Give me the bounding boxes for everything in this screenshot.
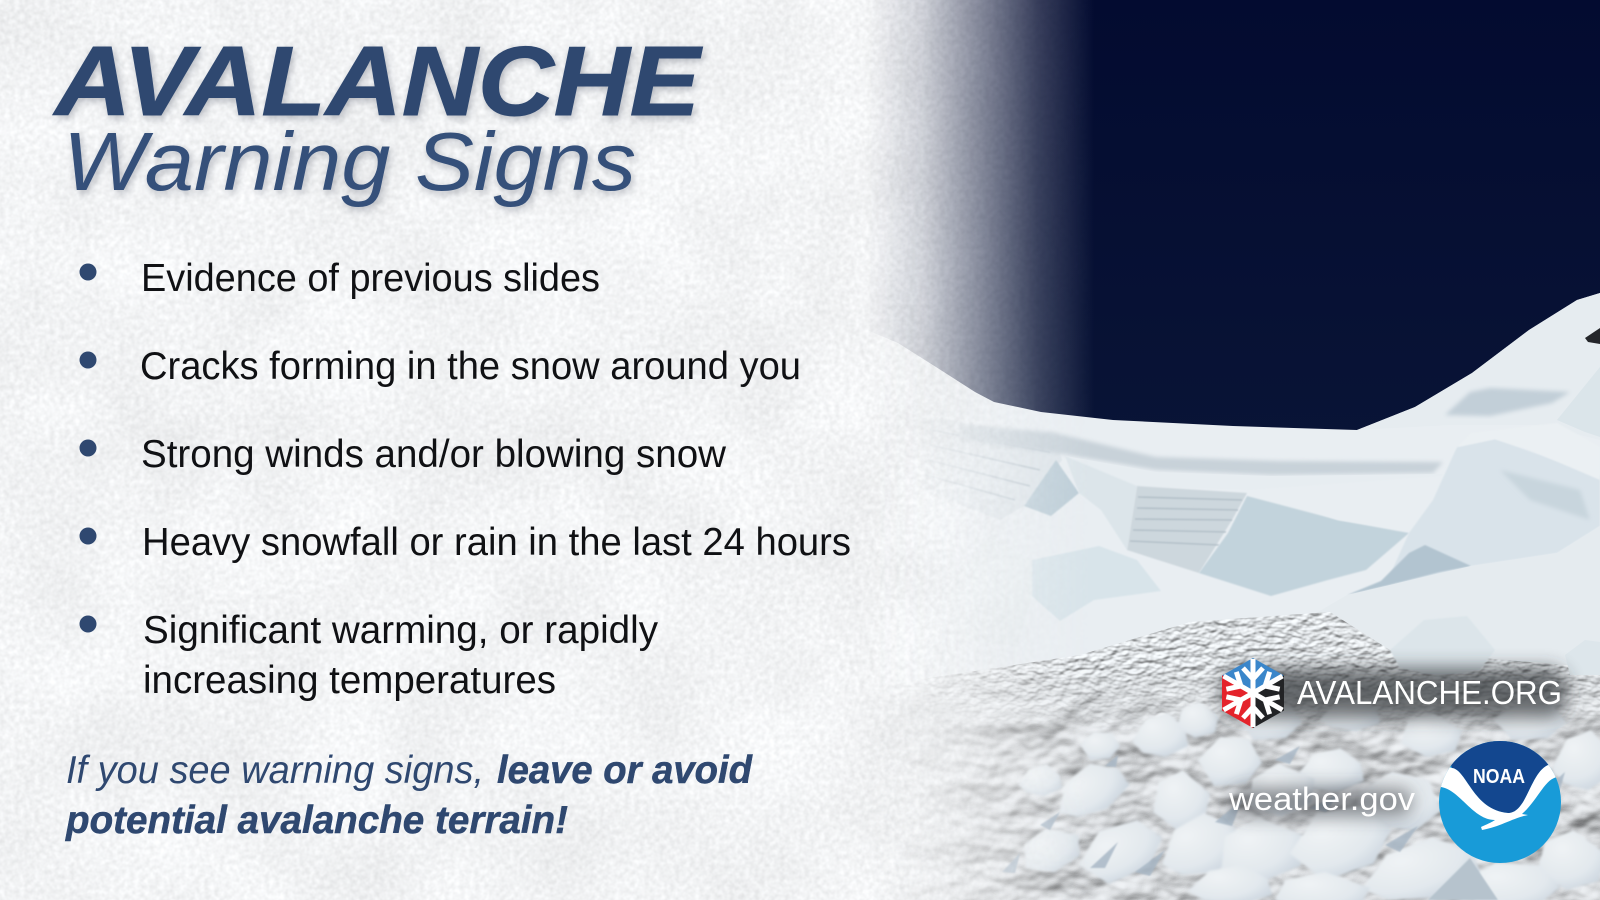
logo: NOAA xyxy=(1439,741,1561,863)
bullet 4 xyxy=(80,528,96,544)
large shadowed ice face xyxy=(1199,496,1409,596)
bullet 1 xyxy=(80,264,96,280)
large snow lumps xyxy=(896,672,1600,900)
item 5: Significant warming, or rapidly xyxy=(143,609,658,652)
icon: hexagon snowflake xyxy=(1222,658,1284,728)
bullet 3 xyxy=(80,440,96,456)
item 1: Evidence of previous slides xyxy=(141,257,600,300)
snow shelf over ice face xyxy=(1251,476,1443,531)
call to action: If you see warning signs, xyxy=(66,749,484,792)
central ice wall xyxy=(1127,486,1247,573)
title xyxy=(52,26,703,208)
wide shelf below band xyxy=(1065,456,1443,490)
shadowed block at bottom xyxy=(1428,858,1498,900)
serac shadow xyxy=(1347,545,1471,595)
lower right snow slope xyxy=(1270,526,1600,680)
text: AVALANCHE.ORG: AVALANCHE.ORG xyxy=(1297,674,1562,711)
rounded ice block xyxy=(1032,546,1161,621)
snow slope base xyxy=(850,293,1600,900)
call to action: potential avalanche terrain! xyxy=(65,799,568,842)
dark sky xyxy=(850,0,1600,450)
ice cliff band xyxy=(960,425,1443,475)
panel: mountain photograph xyxy=(840,0,1600,900)
call to action: leave or avoid xyxy=(497,749,753,792)
logo: avalanche.org xyxy=(1218,655,1567,730)
item 4: Heavy snowfall or rain in the last 24 hours xyxy=(142,521,851,564)
small serac, left xyxy=(946,536,1032,646)
logo: NOAA: NOAA xyxy=(1473,766,1525,788)
small boulder xyxy=(1565,640,1600,675)
heading: Warning Signs: Warning Signs xyxy=(63,115,636,208)
crescent shadows between chunks xyxy=(1002,746,1565,876)
ice wall right of crevasse xyxy=(1065,456,1137,550)
call to action xyxy=(65,749,753,842)
right serac xyxy=(1385,423,1600,586)
heading: AVALANCHE: AVALANCHE xyxy=(52,26,703,136)
bullet 5 xyxy=(80,616,96,632)
item 5 xyxy=(143,609,658,702)
item 2: Cracks forming in the snow around you xyxy=(140,345,801,388)
snow chunks xyxy=(1015,699,1600,900)
panel: snow texture background xyxy=(0,0,1120,900)
item 5: increasing temperatures xyxy=(143,659,556,702)
bullet 2 xyxy=(80,352,96,368)
item 3: Strong winds and/or blowing snow xyxy=(141,433,727,476)
logo: weather.gov: weather.gov xyxy=(1228,781,1415,817)
right peak xyxy=(1357,293,1600,440)
snow boulder xyxy=(1390,616,1495,676)
crevasse xyxy=(1024,460,1079,516)
warning signs list xyxy=(80,257,851,702)
rubble field xyxy=(902,612,1600,900)
ice cliff, upper left xyxy=(922,415,1062,520)
